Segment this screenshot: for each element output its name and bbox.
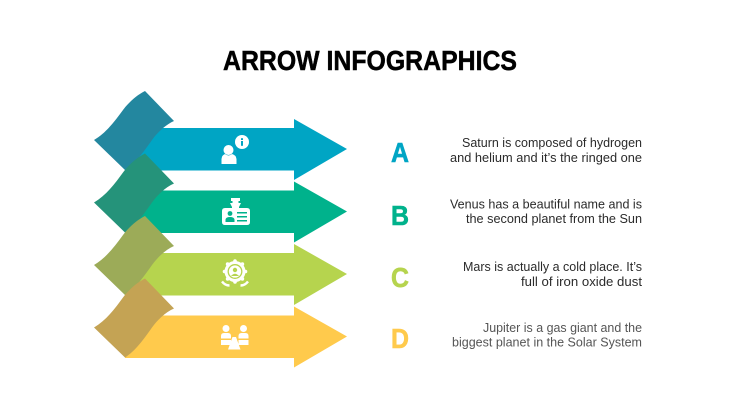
ribbon B [94,154,174,232]
arrow C [125,244,347,305]
text block A: Saturn is composed of hydrogen [462,136,642,150]
text block A: and helium and it’s the ringed one [450,151,642,165]
icon: award seal with person [222,259,248,286]
text block C: full of iron oxide dust [521,275,643,289]
icon: two people and cone [221,325,248,350]
text block C: Mars is actually a cold place. It’s [463,260,642,274]
title: ARROW INFOGRAPHICS [223,45,517,76]
text block D [452,321,642,350]
letter B: B [391,200,409,231]
letter C: C [391,262,409,293]
ribbon D [94,278,174,358]
text block B: Venus has a beautiful name and is [450,198,642,212]
arrow D [125,306,347,368]
text block A [450,136,642,165]
ribbon A [94,91,174,170]
icon: person with info bubble [222,135,249,164]
text block D: Jupiter is a gas giant and the [483,321,642,335]
ribbon C [94,216,174,295]
text block B [450,198,642,226]
text block C [463,260,643,289]
letter D: D [391,323,409,354]
text block B: the second planet from the Sun [466,212,642,226]
letter A: A [391,137,409,168]
icon: ID badge [222,198,250,225]
text block D: biggest planet in the Solar System [452,336,642,350]
arrow B [125,182,347,242]
arrow A [125,119,347,180]
